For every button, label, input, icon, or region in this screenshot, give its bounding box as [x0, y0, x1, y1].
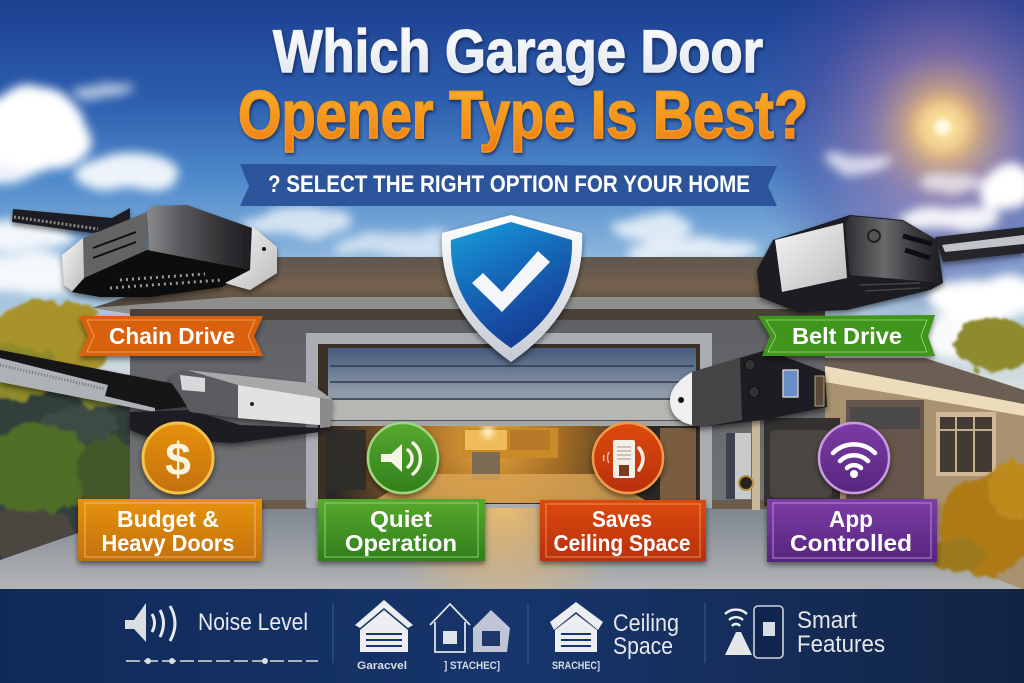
icon: dollar coin — [143, 423, 213, 493]
panel: budget and heavy doors: Heavy Doors — [102, 530, 234, 556]
trees left — [0, 300, 150, 561]
footer: smart features: Features — [797, 631, 885, 658]
panel: app controlled: App — [829, 506, 873, 532]
title: Opener Type Is Best? — [238, 77, 808, 153]
belt drive opener top — [757, 215, 1024, 312]
garage door frame — [306, 333, 712, 508]
footer: smart features: Smart — [797, 607, 857, 634]
label: belt drive: Belt Drive — [792, 323, 902, 349]
panel: quiet operation: Operation — [345, 530, 457, 556]
panel: saves ceiling space: Ceiling Space — [554, 530, 690, 556]
panel: quiet operation: Quiet — [370, 506, 432, 532]
subtitle ribbon: ? SELECT THE RIGHT OPTION FOR YOUR HOME — [268, 171, 750, 198]
footer: garage icon — [355, 600, 413, 672]
opener body — [757, 215, 943, 312]
chain drive opener top — [12, 205, 277, 297]
footer: garage icon: Garacvel — [357, 660, 407, 672]
footer bar — [0, 589, 1024, 683]
label: chain drive — [79, 316, 263, 356]
footer: house icons — [430, 604, 510, 672]
bushes right — [932, 458, 1024, 575]
icon: remote red — [593, 423, 663, 493]
opener body — [130, 410, 325, 443]
opener body — [147, 205, 252, 272]
rail — [0, 350, 205, 410]
icon: speaker green — [368, 423, 438, 493]
belt drive opener lower — [670, 350, 827, 427]
footer: ceiling space: Space — [613, 633, 673, 660]
label: chain drive: Chain Drive — [109, 323, 235, 349]
panel: saves ceiling space: Saves — [592, 506, 652, 532]
subtitle ribbon — [240, 164, 777, 206]
sky background — [0, 0, 1024, 400]
opener screen — [783, 370, 798, 397]
footer: noise level: Noise Level — [198, 609, 308, 636]
footer: ceiling space: Ceiling — [613, 610, 679, 637]
belt rail — [935, 227, 1024, 262]
panel: budget and heavy doors — [78, 499, 262, 561]
title — [238, 18, 808, 153]
tree right — [955, 319, 1024, 371]
rolled up door slats — [326, 348, 696, 426]
sun — [917, 101, 969, 153]
right wing house — [825, 358, 1024, 590]
open garage interior — [326, 425, 698, 503]
driveway — [0, 500, 1024, 590]
chain drive opener lower — [0, 350, 333, 443]
clouds — [0, 82, 1024, 357]
shield with check mark — [442, 215, 582, 362]
garage building — [92, 257, 825, 515]
panel: budget and heavy doors: Budget & — [117, 506, 219, 532]
wall box and lower mechanism — [726, 418, 840, 510]
footer: noise level — [125, 603, 318, 664]
chain rail — [12, 208, 130, 233]
title: Which Garage Door — [273, 18, 763, 85]
icon: dollar coin: $ — [165, 433, 191, 485]
footer: ceiling space: SRACHEC] — [552, 660, 600, 672]
footer: ceiling space — [550, 602, 679, 672]
panel: quiet operation — [318, 499, 485, 561]
panel: app controlled — [767, 499, 937, 562]
footer: smart features — [725, 606, 885, 658]
icon: wifi purple — [819, 423, 889, 493]
panel: app controlled: Controlled — [790, 530, 912, 556]
panel: saves ceiling space — [540, 500, 706, 561]
footer: house icons: ] STACHEC] — [444, 660, 500, 672]
label: belt drive — [758, 315, 935, 356]
